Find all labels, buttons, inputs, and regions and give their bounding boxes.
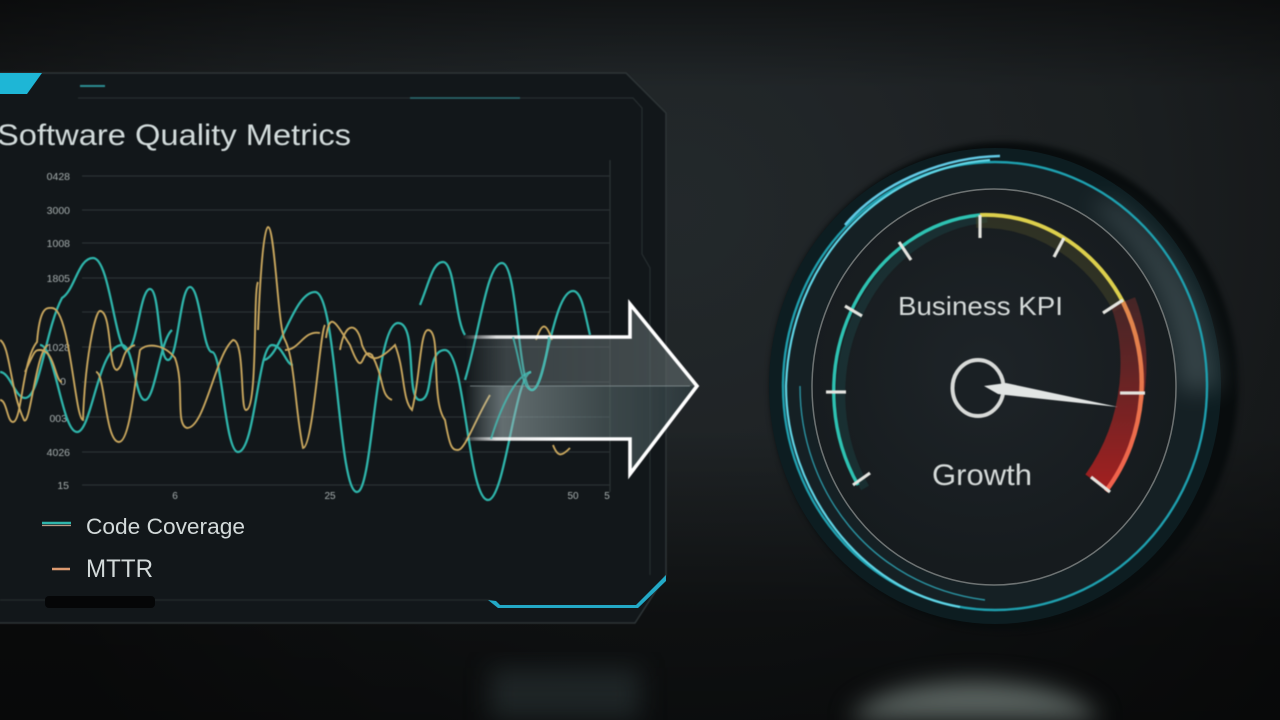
y axis labels: 4026 bbox=[47, 447, 70, 459]
x axis labels: 5 bbox=[604, 491, 610, 502]
code coverage series bbox=[0, 258, 590, 500]
legend: MTTR: MTTR bbox=[86, 555, 153, 583]
colored scale bbox=[834, 215, 1142, 491]
dial face bbox=[812, 189, 1176, 585]
gauge label: business kpi: Business KPI bbox=[898, 291, 1063, 321]
gauge hub bbox=[952, 360, 1004, 416]
x axis labels: 50 bbox=[567, 491, 579, 502]
y axis labels: 0428 bbox=[47, 171, 70, 183]
x axis labels: 6 bbox=[172, 491, 178, 502]
gauge label: growth: Growth bbox=[932, 459, 1032, 492]
gauge bbox=[769, 142, 1238, 630]
panel: software quality metrics bbox=[0, 73, 666, 623]
tick marks bbox=[826, 215, 1145, 492]
gauge needle bbox=[984, 383, 1118, 407]
cyan bottom accent bbox=[488, 575, 666, 608]
gauge bezel bbox=[769, 142, 1238, 630]
legend: MTTR bbox=[52, 555, 153, 583]
y axis labels: 3000 bbox=[47, 205, 70, 217]
y axis labels bbox=[47, 171, 70, 492]
grid lines and axis bbox=[82, 160, 610, 492]
legend: code coverage: Code Coverage bbox=[86, 514, 245, 539]
cyan corner tab bbox=[0, 73, 42, 94]
chart: quality metric lines bbox=[0, 160, 610, 502]
dark notch bbox=[45, 596, 155, 608]
arrow bbox=[462, 304, 697, 474]
y axis labels: 1028 bbox=[47, 342, 70, 354]
y axis labels: 1805 bbox=[47, 273, 70, 285]
MTTR series bbox=[0, 227, 570, 454]
y axis labels: 003 bbox=[49, 413, 67, 425]
y axis labels: 15 bbox=[57, 480, 69, 492]
x axis labels bbox=[172, 491, 610, 502]
panel frame bbox=[0, 73, 666, 623]
y axis labels: 1008 bbox=[47, 238, 70, 250]
floor reflections bbox=[490, 668, 1100, 720]
outer teal rings bbox=[783, 156, 1207, 610]
legend bbox=[42, 514, 245, 583]
x axis labels: 25 bbox=[324, 491, 336, 502]
y axis labels: 0 bbox=[60, 376, 66, 388]
title: Software Quality Metrics bbox=[0, 119, 351, 152]
